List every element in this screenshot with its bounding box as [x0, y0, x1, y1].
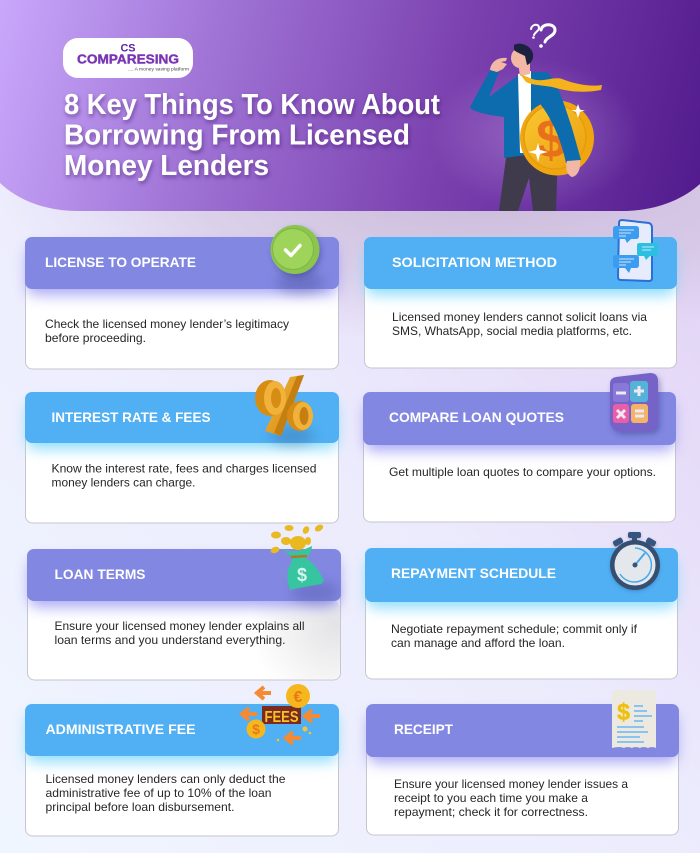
neck and head: [518, 60, 530, 76]
illustration: thinking man holding a coin: [470, 25, 602, 211]
question marks: [531, 25, 555, 47]
icon: receipt with dollar sign: [612, 690, 656, 748]
body text: administrative fee of up to 10% of the loan: [46, 786, 272, 800]
icon: fees with coins and arrows: FEES: [264, 709, 299, 726]
heading band: [25, 392, 339, 443]
heading band: LOAN TERMS: [54, 566, 146, 582]
body text: before proceeding.: [45, 331, 146, 345]
icon: fees with coins and arrows: $: [252, 721, 260, 737]
body text: [45, 317, 289, 345]
icon: money bag with coins: [270, 523, 324, 590]
body text: Ensure your licensed money lender explains all: [54, 619, 304, 633]
heading band: INTEREST RATE & FEES: [52, 409, 210, 425]
panel: solicitation method: [364, 220, 677, 368]
logo: CS: [120, 42, 136, 54]
heading band: [366, 704, 679, 757]
logo: [63, 38, 193, 78]
panel: interest rate and fees: [25, 375, 339, 523]
body text: Licensed money lenders can only deduct the: [46, 772, 286, 786]
panel: repayment schedule: [365, 532, 678, 679]
logo: .... A money saving platform: [128, 66, 189, 72]
sparkles: [528, 104, 585, 162]
icon: stopwatch: [610, 532, 660, 590]
title: 8 Key Things To Know About: [64, 89, 440, 121]
panel: license to operate: [25, 225, 339, 369]
body text: SMS, WhatsApp, social media platforms, etc.: [392, 324, 632, 338]
icon: green check coin: [270, 225, 320, 274]
title: Borrowing From Licensed: [64, 120, 410, 152]
logo: COMPARESING: [77, 52, 179, 66]
hair: [514, 44, 533, 65]
heading band: [25, 237, 339, 289]
right arm: [531, 72, 581, 163]
icon: receipt with dollar sign: $: [617, 699, 630, 725]
body text: Licensed money lenders cannot solicit loans via: [392, 310, 647, 324]
hand at chin: [490, 58, 507, 72]
body text: Check the licensed money lender’s legitimacy: [45, 317, 289, 331]
icon: gold percent sign: [255, 375, 313, 436]
heading band: [364, 237, 677, 289]
icon: calculator: [610, 373, 658, 432]
panel: receipt: [366, 690, 679, 835]
heading band: ADMINISTRATIVE FEE: [46, 721, 196, 737]
hand on coin: [566, 160, 580, 177]
coin: [520, 100, 594, 176]
jacket and raised arm: [470, 70, 540, 158]
icon: phone with chat bubbles: [613, 220, 658, 281]
heading band: [25, 704, 339, 756]
body text: principal before loan disbursement.: [46, 800, 234, 814]
body text: [54, 619, 304, 647]
necktie: [520, 74, 602, 92]
body text: [394, 777, 628, 819]
heading band: [27, 549, 341, 601]
heading band: [363, 392, 676, 445]
panel: compare loan quotes: [363, 373, 676, 522]
icon: fees with coins and arrows: [242, 684, 320, 744]
body text: repayment; check it for correctness.: [394, 805, 588, 819]
icon: money bag with coins: $: [297, 565, 307, 585]
panel: administrative fee: [25, 684, 339, 836]
heading band: [365, 548, 678, 602]
icon: fees with coins and arrows: €: [294, 689, 303, 706]
heading band: SOLICITATION METHOD: [392, 254, 557, 270]
body text: [391, 622, 638, 650]
trousers: [499, 150, 558, 211]
title: Money Lenders: [64, 150, 269, 182]
heading band: LICENSE TO OPERATE: [45, 254, 196, 270]
body text: Get multiple loan quotes to compare your options.: [389, 465, 656, 479]
heading band: REPAYMENT SCHEDULE: [391, 565, 556, 581]
heading band: COMPARE LOAN QUOTES: [389, 409, 564, 425]
body text: [392, 310, 647, 338]
panel: loan terms: [27, 523, 341, 680]
shirt: [518, 71, 531, 153]
body text: Negotiate repayment schedule; commit only if: [391, 622, 638, 636]
body text: Know the interest rate, fees and charges licensed: [52, 462, 316, 476]
body text: [46, 772, 286, 814]
body text: can manage and afford the loan.: [391, 636, 565, 650]
hero banner: [0, 0, 700, 211]
body text: money lenders can charge.: [52, 476, 196, 490]
body text: receipt to you each time you make a: [394, 791, 588, 805]
body text: [52, 462, 316, 490]
coin: $: [536, 109, 566, 169]
body text: loan terms and you understand everything.: [54, 633, 286, 647]
title: [64, 89, 440, 182]
body text: Ensure your licensed money lender issues a: [394, 777, 628, 791]
heading band: RECEIPT: [394, 721, 453, 737]
